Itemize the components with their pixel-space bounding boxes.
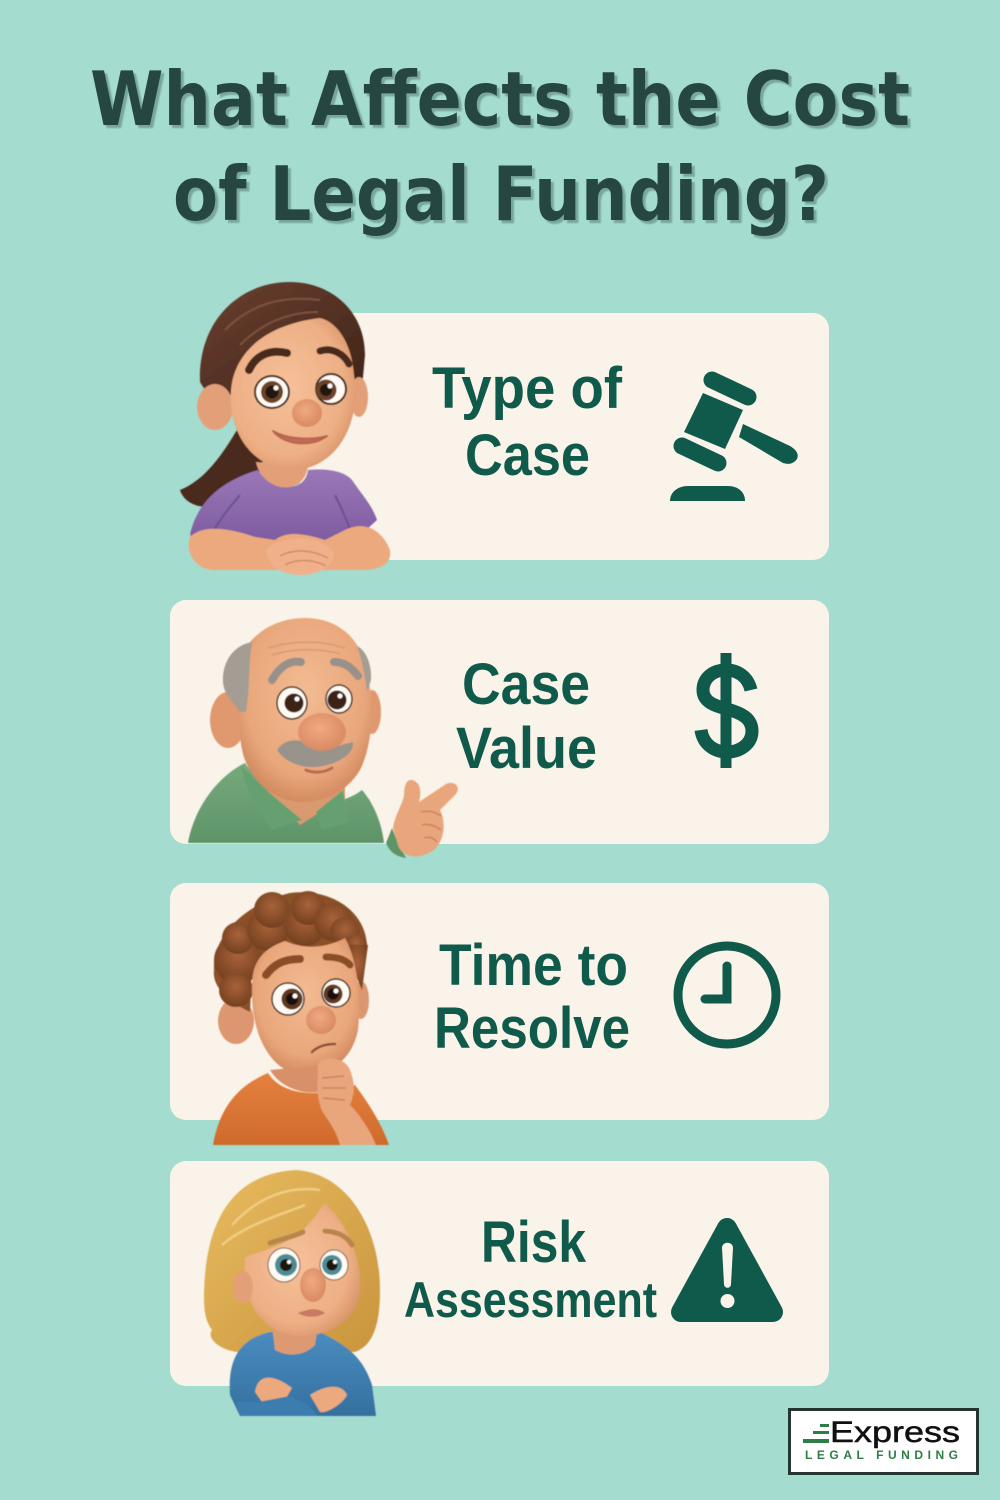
card background 1: [300, 313, 829, 560]
heading: type of case: Type of: [432, 356, 623, 421]
title: of Legal Funding?: [173, 150, 829, 238]
character: older man in green polo: [188, 618, 458, 858]
logo speed lines: [803, 1424, 829, 1443]
heading: risk assessment: Assessment: [404, 1272, 657, 1328]
character: boy with curly hair in orange shirt: [213, 891, 389, 1145]
heading: time to resolve: [434, 933, 630, 1061]
heading: case value: Case: [462, 652, 590, 717]
icon: dollar sign: [701, 653, 752, 768]
heading: time to resolve: Resolve: [434, 996, 630, 1061]
logo wordmark: Express: [830, 1416, 960, 1449]
heading: case value: [456, 652, 597, 781]
panel: time to resolve: [170, 883, 829, 1120]
title: What Affects the Cost: [93, 58, 913, 146]
heading: risk assessment: Risk: [481, 1210, 587, 1275]
icon: gavel: [670, 380, 798, 501]
heading: case value: Value: [456, 716, 597, 781]
panel: type of case: [300, 313, 829, 560]
icon: warning triangle: [681, 1228, 773, 1312]
heading: risk assessment: [404, 1210, 657, 1328]
heading: time to resolve: Time to: [439, 933, 628, 998]
card background 3: [170, 883, 829, 1120]
heading: type of case: Case: [465, 423, 590, 488]
card background 2: [170, 600, 829, 844]
panel: case value: [170, 600, 829, 844]
title: What Affects the Cost: [90, 55, 910, 143]
curly hair: [214, 891, 368, 1012]
panel: risk assessment: [170, 1161, 829, 1386]
title: of Legal Funding?: [176, 153, 832, 241]
logo: express legal funding: [790, 1410, 978, 1474]
heading: type of case: [432, 356, 623, 488]
icon: clock: [678, 946, 776, 1044]
logo tagline: LEGAL FUNDING: [805, 1448, 958, 1462]
title: [90, 55, 913, 241]
character: girl in purple shirt: [180, 282, 390, 575]
card background 4: [170, 1161, 829, 1386]
character: blonde woman with crossed arms: [204, 1170, 380, 1416]
